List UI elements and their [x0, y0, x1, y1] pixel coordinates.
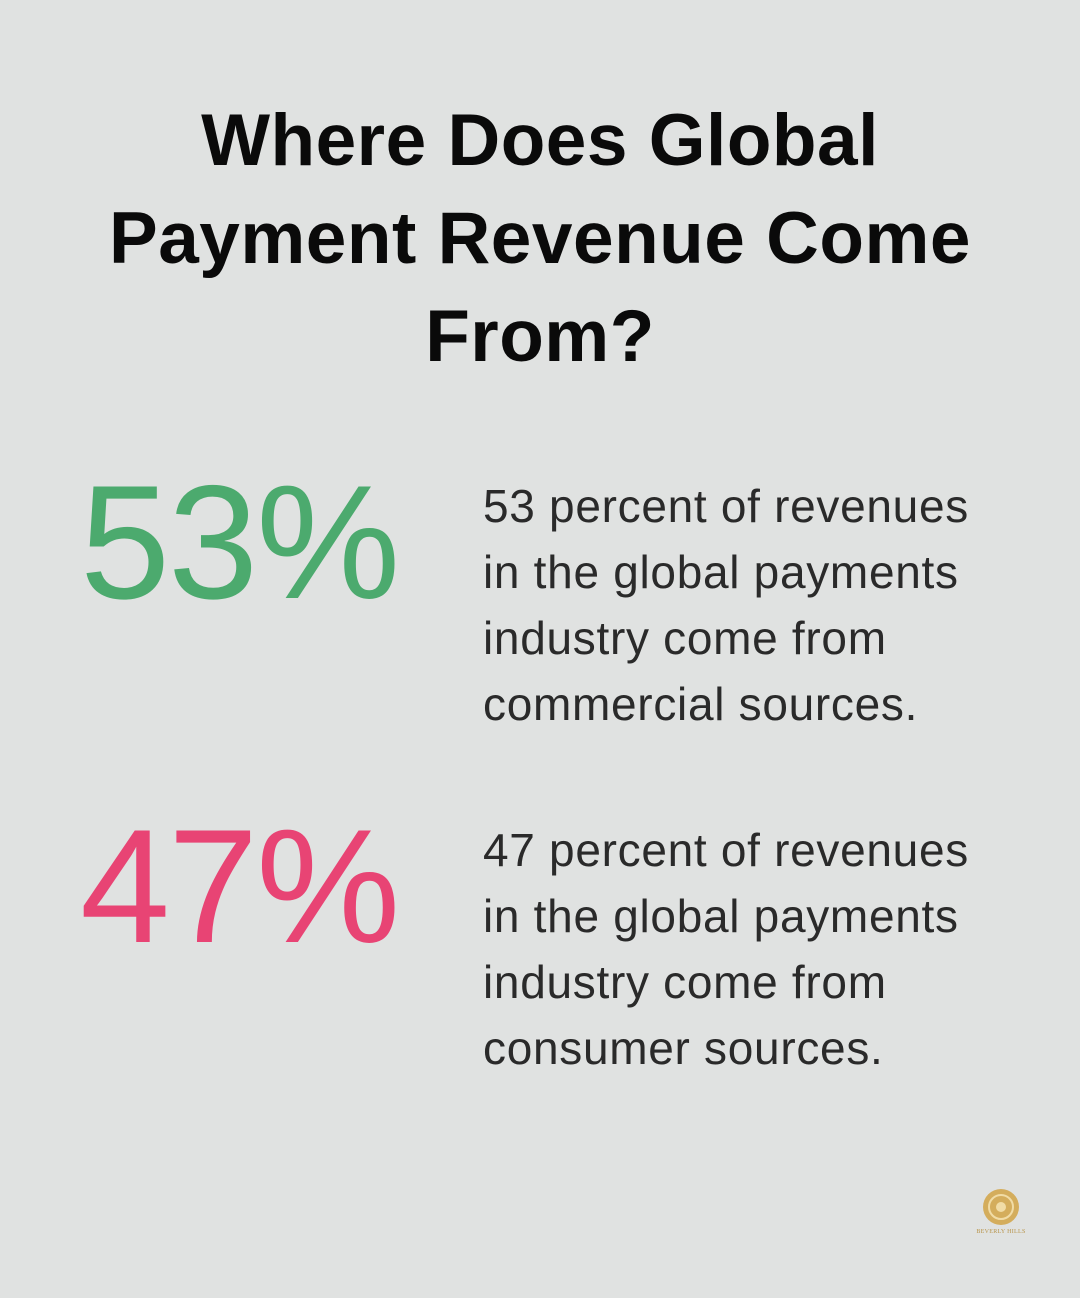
text: commercial sources — [483, 480, 969, 730]
text: consumer sources: consumer sources. — [483, 1022, 884, 1074]
stat: 53%: 53% — [80, 452, 398, 633]
text: consumer sources: in the global payments — [483, 890, 959, 942]
text: consumer sources — [483, 824, 969, 1074]
text: consumer sources: 47 percent of revenues — [483, 824, 969, 876]
text: commercial sources: in the global payments — [483, 546, 959, 598]
text: commercial sources: 53 percent of revenues — [483, 480, 969, 532]
logo — [976, 1189, 1026, 1235]
title — [109, 100, 971, 377]
title: Where Does Global — [201, 100, 879, 181]
title: From? — [425, 296, 655, 377]
text: consumer sources: industry come from — [483, 956, 887, 1008]
text: commercial sources: industry come from — [483, 612, 887, 664]
stat: 47%: 47% — [80, 796, 398, 977]
text: commercial sources: commercial sources. — [483, 678, 918, 730]
logo: BEVERLY HILLS — [976, 1229, 1026, 1235]
title: Payment Revenue Come — [109, 198, 971, 279]
